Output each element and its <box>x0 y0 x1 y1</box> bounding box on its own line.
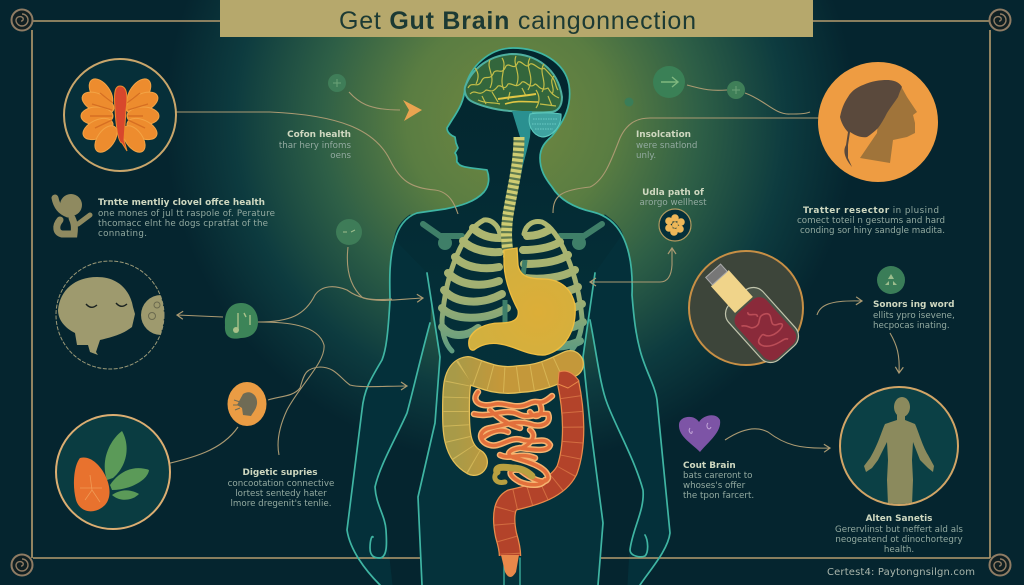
icon: tiny green dot <box>624 98 634 106</box>
brain <box>465 54 562 190</box>
icon: green plus node <box>727 81 745 99</box>
icon: small green circle top <box>328 74 346 92</box>
text: mental health: connating. <box>98 229 147 239</box>
text: tratter resector <box>797 206 945 236</box>
icon: orange arrow <box>403 100 422 121</box>
rib cage <box>442 220 583 351</box>
text: tratter resector: comect toteil n gestums and hard <box>797 216 945 226</box>
text: path of: Udla path of <box>642 188 704 198</box>
text: gut brain: whoses's offer <box>683 481 746 491</box>
text: gut brain: Cout Brain <box>683 461 736 471</box>
torso and head silhouette <box>395 48 622 585</box>
text: tratter resector: conding sor hiny sandgle madita. <box>800 226 945 236</box>
text: digestive supplies <box>228 468 334 509</box>
panel: orange fruit and leaves circle <box>56 415 170 529</box>
text: alten sanetis: health. <box>884 545 914 555</box>
text: digestive supplies: concootation connective <box>228 479 334 489</box>
icon: flower circle <box>659 209 691 241</box>
text: sonors: ellits ypro isevene, <box>873 311 955 321</box>
text: tratter resector: Tratter resector in plusind <box>803 206 939 216</box>
text: mental health: one mones of jul tt raspole of. Perature <box>98 209 275 219</box>
text: colon health <box>279 130 351 161</box>
text: insolcation: were snatlond <box>636 141 697 151</box>
clavicles <box>423 224 602 250</box>
panel: body silhouette circle <box>840 387 958 505</box>
text: gut brain: the tpon farcert. <box>683 491 754 501</box>
panel: jar circle <box>689 251 804 368</box>
text: insolcation <box>636 130 697 161</box>
spine <box>507 137 519 262</box>
text: colon health: oens <box>330 151 351 161</box>
text: colon health: Cofon health <box>287 130 351 140</box>
corner ornament bottom right <box>990 554 1010 576</box>
text: digestive supplies: lmore dregenit's tenlie. <box>231 499 331 509</box>
text: credit: Certest4: Paytongnsilgn.com <box>827 567 975 578</box>
icon: green node left <box>336 219 362 245</box>
colon <box>456 364 579 577</box>
central human body with organs <box>347 48 670 585</box>
icon: green music-like node <box>225 303 258 339</box>
arms fill <box>347 215 670 585</box>
text: alten sanetis: Gerervlinst but neffert ald als <box>835 525 963 535</box>
text: alten sanetis: neogeatend ot dinochortegry <box>835 535 963 545</box>
text: path of: arorgo wellhest <box>639 198 707 208</box>
text: gut brain: bats careront to <box>683 471 752 481</box>
icon: purple heart <box>679 415 720 452</box>
text: colon health: thar hery infoms <box>279 141 351 151</box>
text: sonors: Sonors ing word <box>873 300 954 310</box>
icon: green leaf node <box>877 266 905 294</box>
panel: head profile circle <box>818 62 938 182</box>
icon: green arrow node <box>653 66 685 98</box>
text: insolcation: unly. <box>636 151 656 161</box>
small intestine <box>474 392 552 485</box>
text: gut brain <box>683 461 754 501</box>
text: alten sanetis <box>835 514 963 555</box>
text: sonors <box>873 300 955 331</box>
corner ornament top left <box>12 10 32 30</box>
text: insolcation: Insolcation <box>636 130 691 140</box>
title banner: Get Gut Brain caingonnection <box>339 7 696 35</box>
text: digestive supplies: lortest sentedy hater <box>235 489 327 499</box>
text: mental health: thcomacc elnt he dogs cpratfat of the <box>98 219 268 229</box>
body outline <box>347 48 670 585</box>
text: alten sanetis: Alten Sanetis <box>866 514 932 524</box>
text: path of <box>639 188 707 208</box>
panel: sleeping face circle <box>56 260 164 370</box>
sternum connections <box>505 260 525 335</box>
title banner <box>220 0 813 37</box>
cerebellum <box>529 113 561 137</box>
corner ornament top right <box>990 10 1010 30</box>
stomach <box>469 248 575 355</box>
icon: orange speaking head <box>228 382 266 426</box>
icon: curled figure <box>55 194 90 234</box>
connector arrows <box>153 85 899 467</box>
panel: butterfly organ circle <box>64 59 176 171</box>
text: mental health <box>98 198 275 239</box>
text: sonors: hecpocas inating. <box>873 321 950 331</box>
text: mental health: Trntte mentliy clovel offce health <box>98 198 265 208</box>
corner ornament bottom left <box>12 554 32 576</box>
text: digestive supplies: Digetic supries <box>242 468 318 478</box>
brain stem <box>512 111 532 190</box>
